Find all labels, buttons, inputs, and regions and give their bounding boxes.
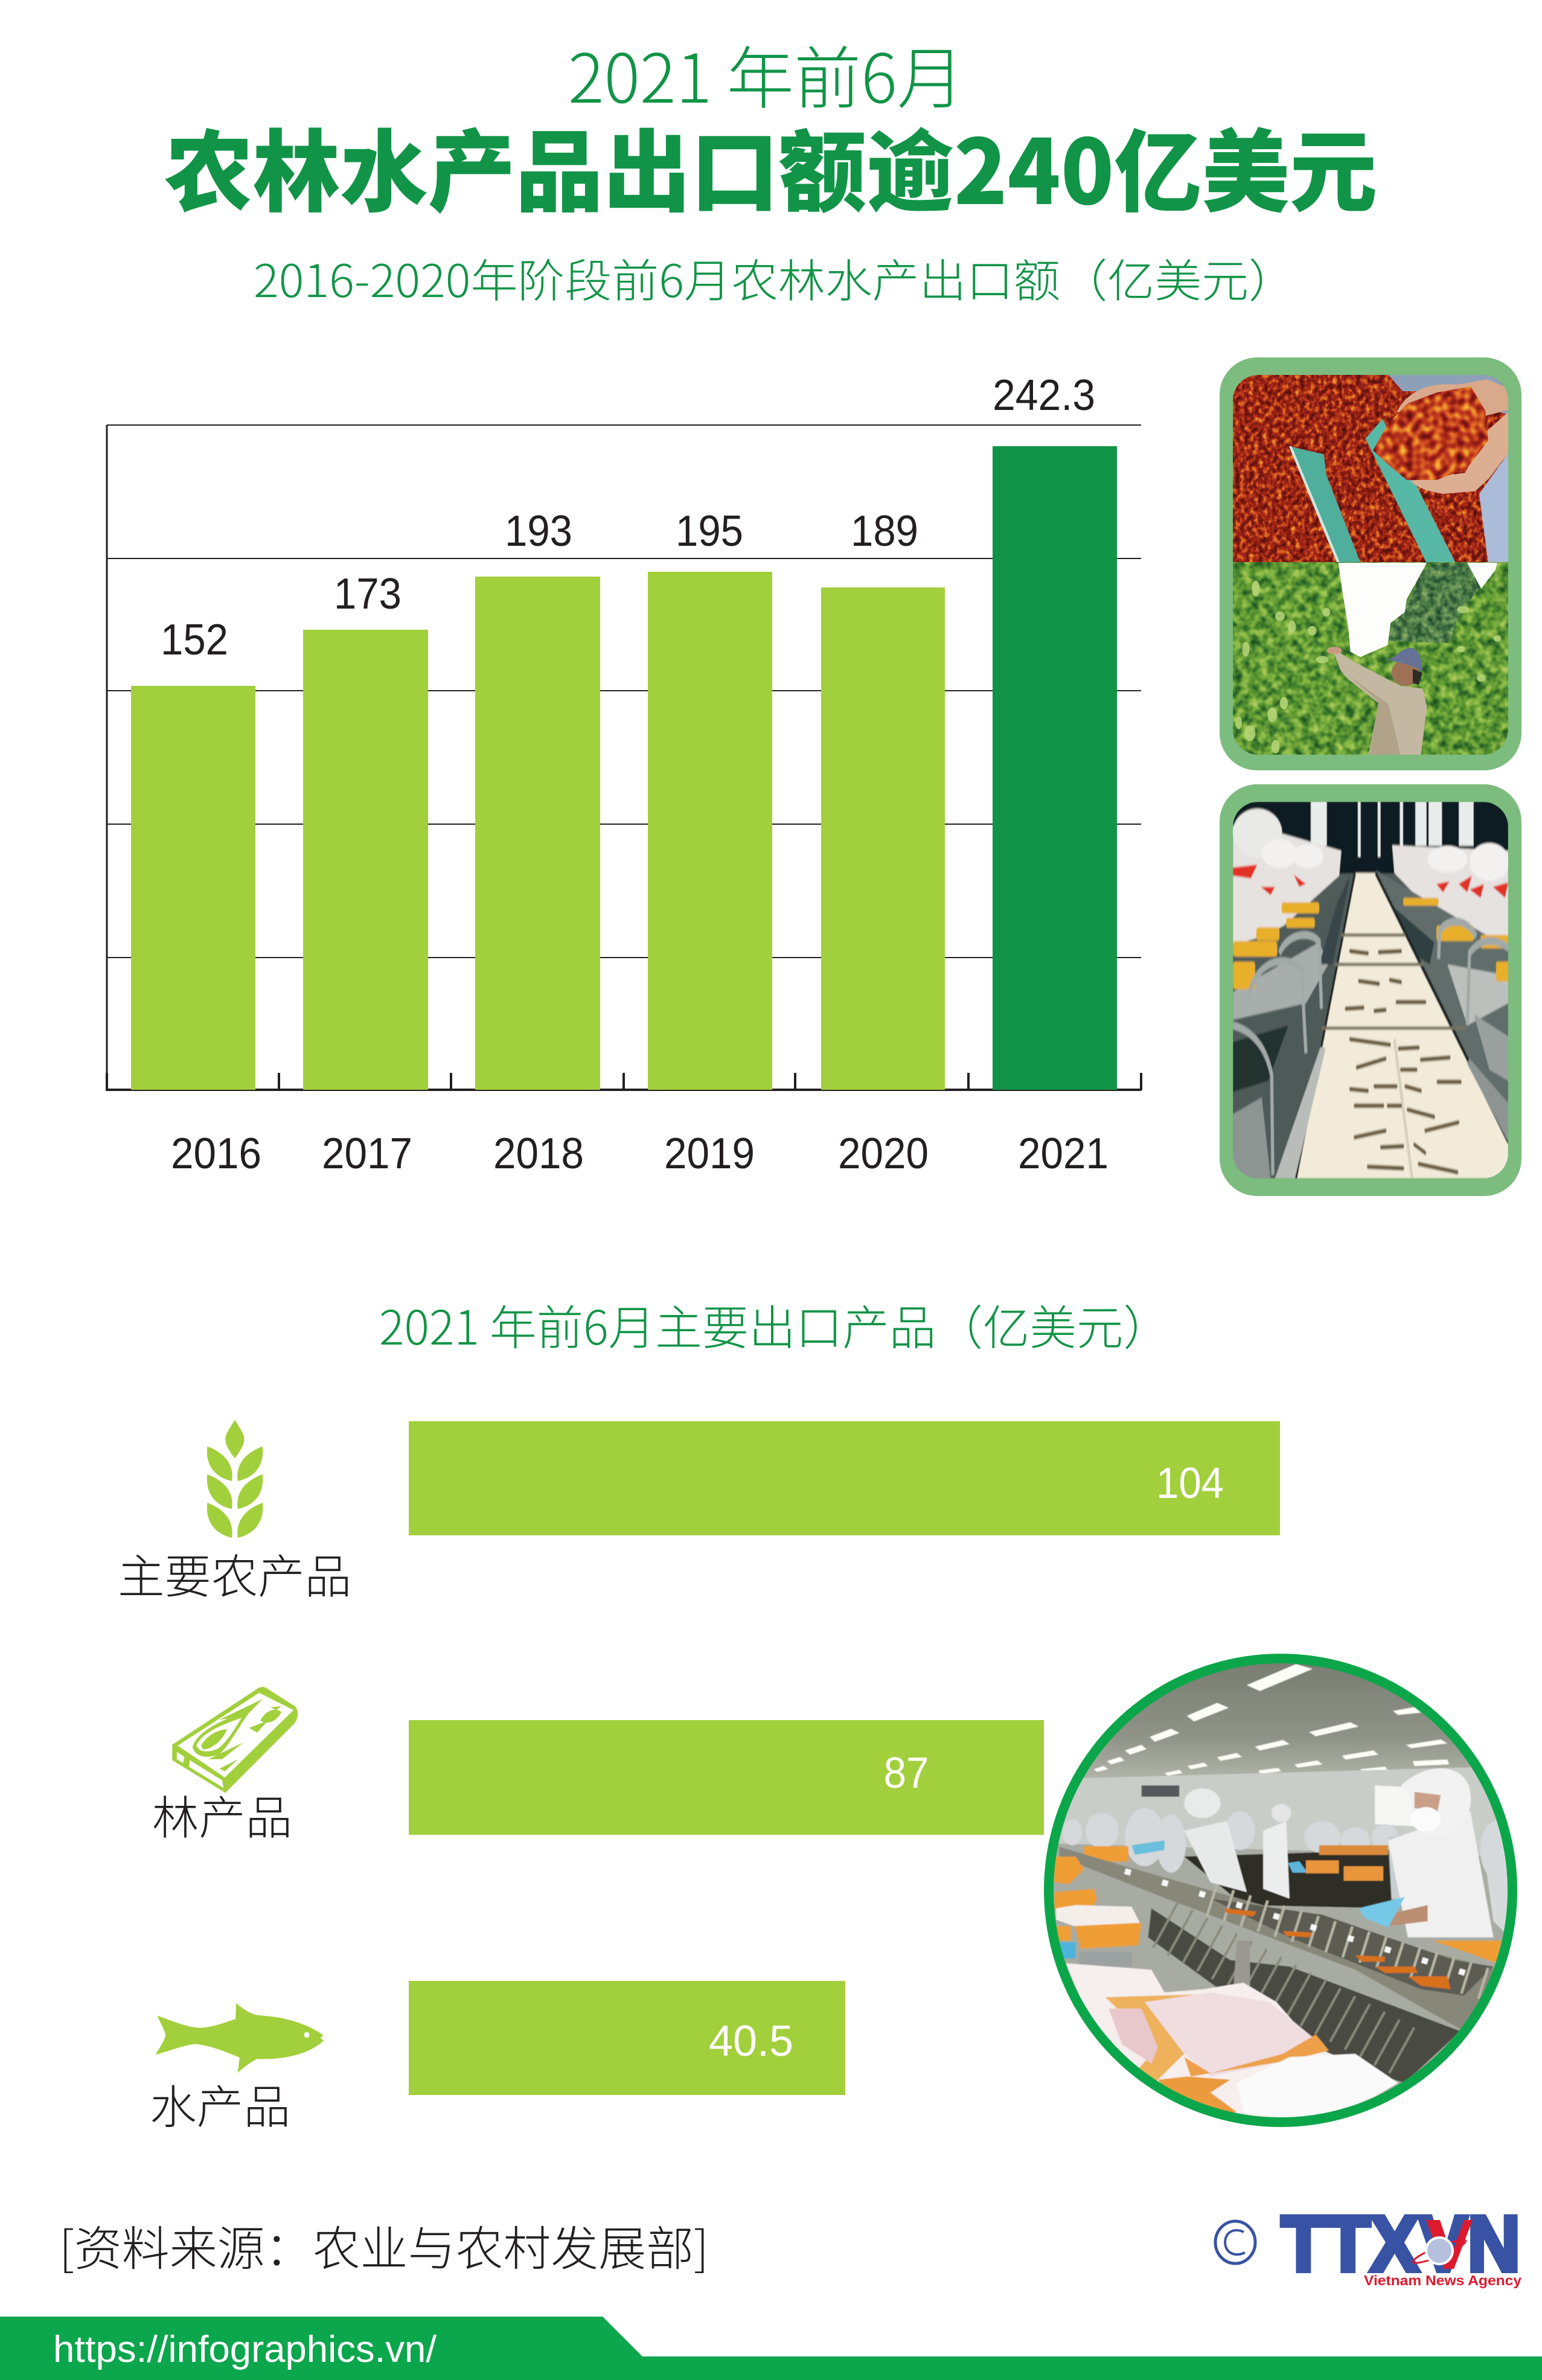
value labels: 189 xyxy=(851,507,918,555)
circular photo: fish processing factory xyxy=(1026,1630,1542,2137)
value labels: 193 xyxy=(505,507,572,555)
chart axes and grid xyxy=(106,425,1141,1090)
icon: wheat xyxy=(207,1420,263,1538)
bar 2017 xyxy=(303,630,428,1090)
title block xyxy=(165,25,1377,230)
chart heading: 2016-2020年阶段前6月农林水产出口额（亿美元） xyxy=(254,245,1296,310)
title line 2: 农林水产品出口额逾240亿美元 xyxy=(165,100,1377,230)
label: 主要农产品 xyxy=(118,1540,351,1607)
bar 2020 xyxy=(821,587,945,1090)
year labels: 2017 xyxy=(322,1130,412,1178)
year labels: 2021 xyxy=(1018,1130,1109,1178)
farmer xyxy=(1326,647,1427,756)
ceiling xyxy=(1026,1630,1542,1782)
globe xyxy=(1411,2236,1468,2266)
bar 2018 xyxy=(475,577,600,1090)
value: 87 xyxy=(884,1749,929,1797)
bar 2021 xyxy=(993,446,1117,1090)
photo panel: shrimp processing line xyxy=(1220,784,1521,1196)
value labels: 173 xyxy=(334,570,401,618)
photo panel: coffee beans and pepper farmer xyxy=(1220,357,1521,770)
dark tree behind the farmer xyxy=(1389,563,1482,643)
icon: wood plank xyxy=(172,1687,298,1793)
label: 水产品 xyxy=(150,2070,290,2137)
value: 104 xyxy=(1156,1459,1224,1508)
year labels: 2018 xyxy=(493,1130,584,1178)
photo content xyxy=(1026,1630,1542,2137)
centre workers xyxy=(1184,1821,1247,1892)
bar xyxy=(409,1981,845,2095)
edge rails xyxy=(1275,1048,1326,1179)
berries falling down the chute xyxy=(1323,454,1368,562)
value: 40.5 xyxy=(709,2017,793,2065)
bar 2019 xyxy=(648,572,772,1090)
back wall xyxy=(1056,1766,1520,1857)
website url: https://infographics.vn/ xyxy=(53,2329,437,2370)
right foreground worker xyxy=(1388,1811,1493,1937)
foreground trays with ice xyxy=(1066,1963,1398,2128)
orange baskets on the left xyxy=(1054,1857,1502,1963)
value labels: 242.3 xyxy=(993,371,1095,420)
footer shape xyxy=(0,2317,1542,2380)
gloves xyxy=(1233,898,1509,990)
blue gloves and baskets xyxy=(1131,1840,1165,1855)
value labels xyxy=(161,371,1095,664)
footer band xyxy=(0,2317,1542,2380)
source note: [资料来源：农业与农村发展部] xyxy=(59,2212,709,2279)
photo content xyxy=(1233,801,1509,1179)
title line 1: 2021 年前6月 xyxy=(568,25,964,123)
workers right xyxy=(1392,845,1508,939)
year labels: 2016 xyxy=(171,1130,261,1178)
coffee berries background xyxy=(1233,375,1508,562)
red V xyxy=(1426,2220,1473,2269)
photo ring xyxy=(1044,1654,1517,2127)
copyright symbol xyxy=(1215,2221,1255,2263)
year labels: 2019 xyxy=(664,1130,755,1178)
background workers xyxy=(1063,1808,1513,1879)
label: 林产品 xyxy=(152,1781,292,1847)
workers left xyxy=(1233,826,1342,945)
conveyor frame xyxy=(1059,1847,1510,2031)
photo content xyxy=(1233,373,1509,756)
shrimp xyxy=(1346,951,1460,1172)
year labels xyxy=(171,1130,1109,1178)
pepper leaves background xyxy=(1233,562,1508,755)
bar xyxy=(409,1421,1280,1535)
handful of berries xyxy=(1373,386,1488,480)
bar 2016 xyxy=(131,686,255,1090)
light leaves xyxy=(1235,581,1501,753)
row: aquatic products xyxy=(150,1981,845,2137)
row: forest products xyxy=(152,1687,1044,1847)
sky xyxy=(1339,563,1427,657)
year labels: 2020 xyxy=(838,1130,929,1178)
sky, chute and hands xyxy=(1289,373,1509,563)
value labels: 195 xyxy=(676,507,743,555)
row: main agricultural products xyxy=(118,1420,1280,1607)
panel frame xyxy=(1220,357,1521,770)
value labels: 152 xyxy=(161,616,228,664)
conveyor belt xyxy=(1296,873,1508,1179)
section heading: main export products: 2021 年前6月主要出口产品（亿美元） xyxy=(379,1291,1170,1358)
logo: TTXVN Vietnam News Agency xyxy=(1215,2199,1521,2288)
logo wordmark: TTXVN xyxy=(1281,2199,1520,2288)
icon: fish xyxy=(155,2003,324,2073)
panel frame xyxy=(1220,784,1521,1196)
bar chart: export value 2016-2021 xyxy=(106,371,1141,1178)
dark floor behind line xyxy=(1184,1850,1392,1908)
cross bars xyxy=(1322,935,1465,1028)
metal hoops xyxy=(1233,921,1508,1175)
bar xyxy=(409,1720,1044,1835)
logo tagline: Vietnam News Agency xyxy=(1364,2273,1521,2288)
